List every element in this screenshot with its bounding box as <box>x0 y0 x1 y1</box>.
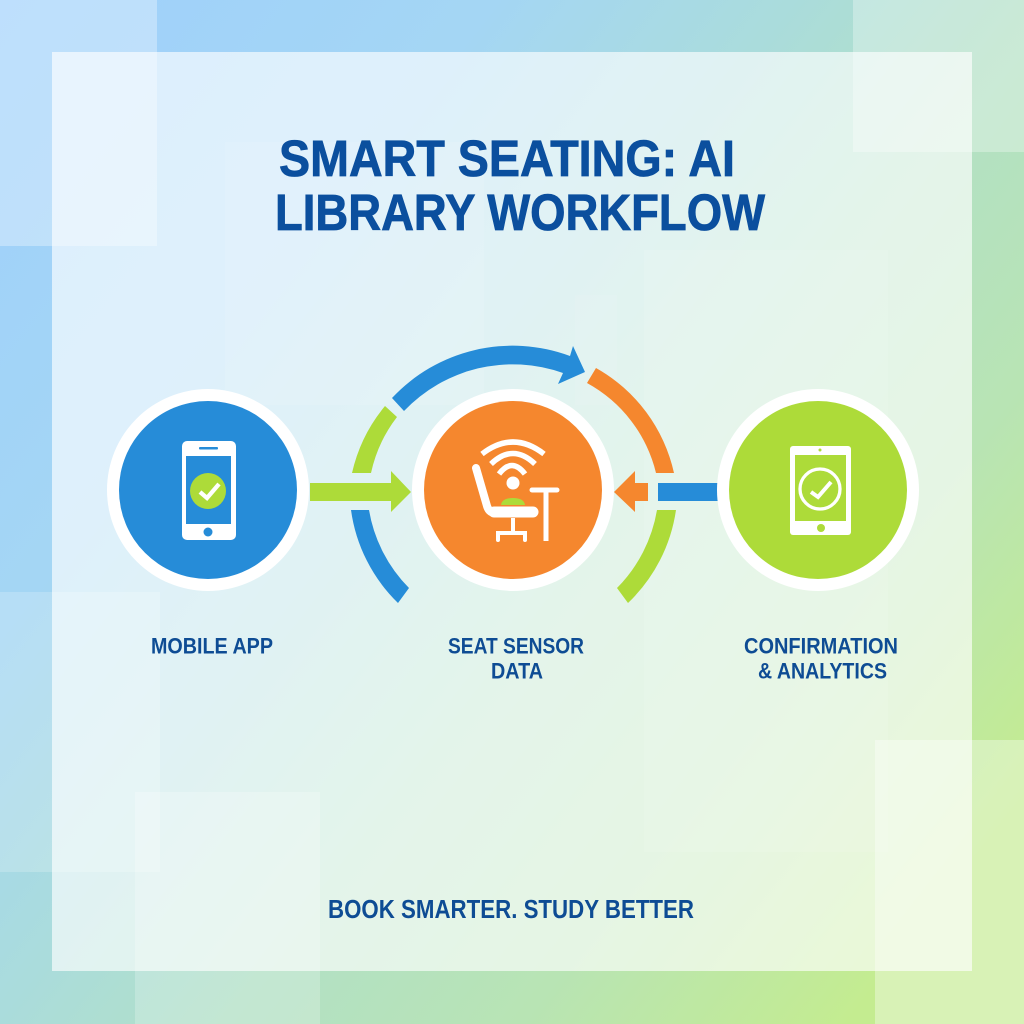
arc: lower left blue <box>351 510 409 603</box>
arrow: orange into sensor <box>614 471 648 512</box>
tagline: BOOK SMARTER. STUDY BETTER <box>328 896 694 924</box>
arc: upper left green <box>352 406 397 473</box>
label: mobile app: MOBILE APP <box>151 634 273 658</box>
icon: tablet with check <box>790 446 851 535</box>
icon: phone with check <box>182 441 236 540</box>
node: mobile app <box>107 389 309 591</box>
label: seat sensor data: SEAT SENSOR <box>448 634 584 658</box>
arc: top blue arrow <box>392 346 585 411</box>
title: SMART SEATING: AI <box>279 130 735 187</box>
node: confirmation <box>717 389 919 591</box>
label: confirmation and analytics <box>744 634 898 684</box>
node: seat sensor <box>412 389 614 591</box>
title: LIBRARY WORKFLOW <box>275 184 766 241</box>
label: confirmation and analytics: CONFIRMATION <box>744 634 898 658</box>
label: seat sensor data <box>448 634 584 684</box>
arc: lower right green <box>617 510 676 603</box>
title <box>275 130 766 241</box>
connector: blue bar <box>658 483 718 501</box>
label: confirmation and analytics: & ANALYTICS <box>758 658 887 684</box>
arrow: green into sensor <box>310 471 411 512</box>
arc: upper right orange <box>587 368 674 473</box>
icon: chair with wifi and desk <box>476 442 557 541</box>
label: seat sensor data: DATA <box>491 658 543 684</box>
